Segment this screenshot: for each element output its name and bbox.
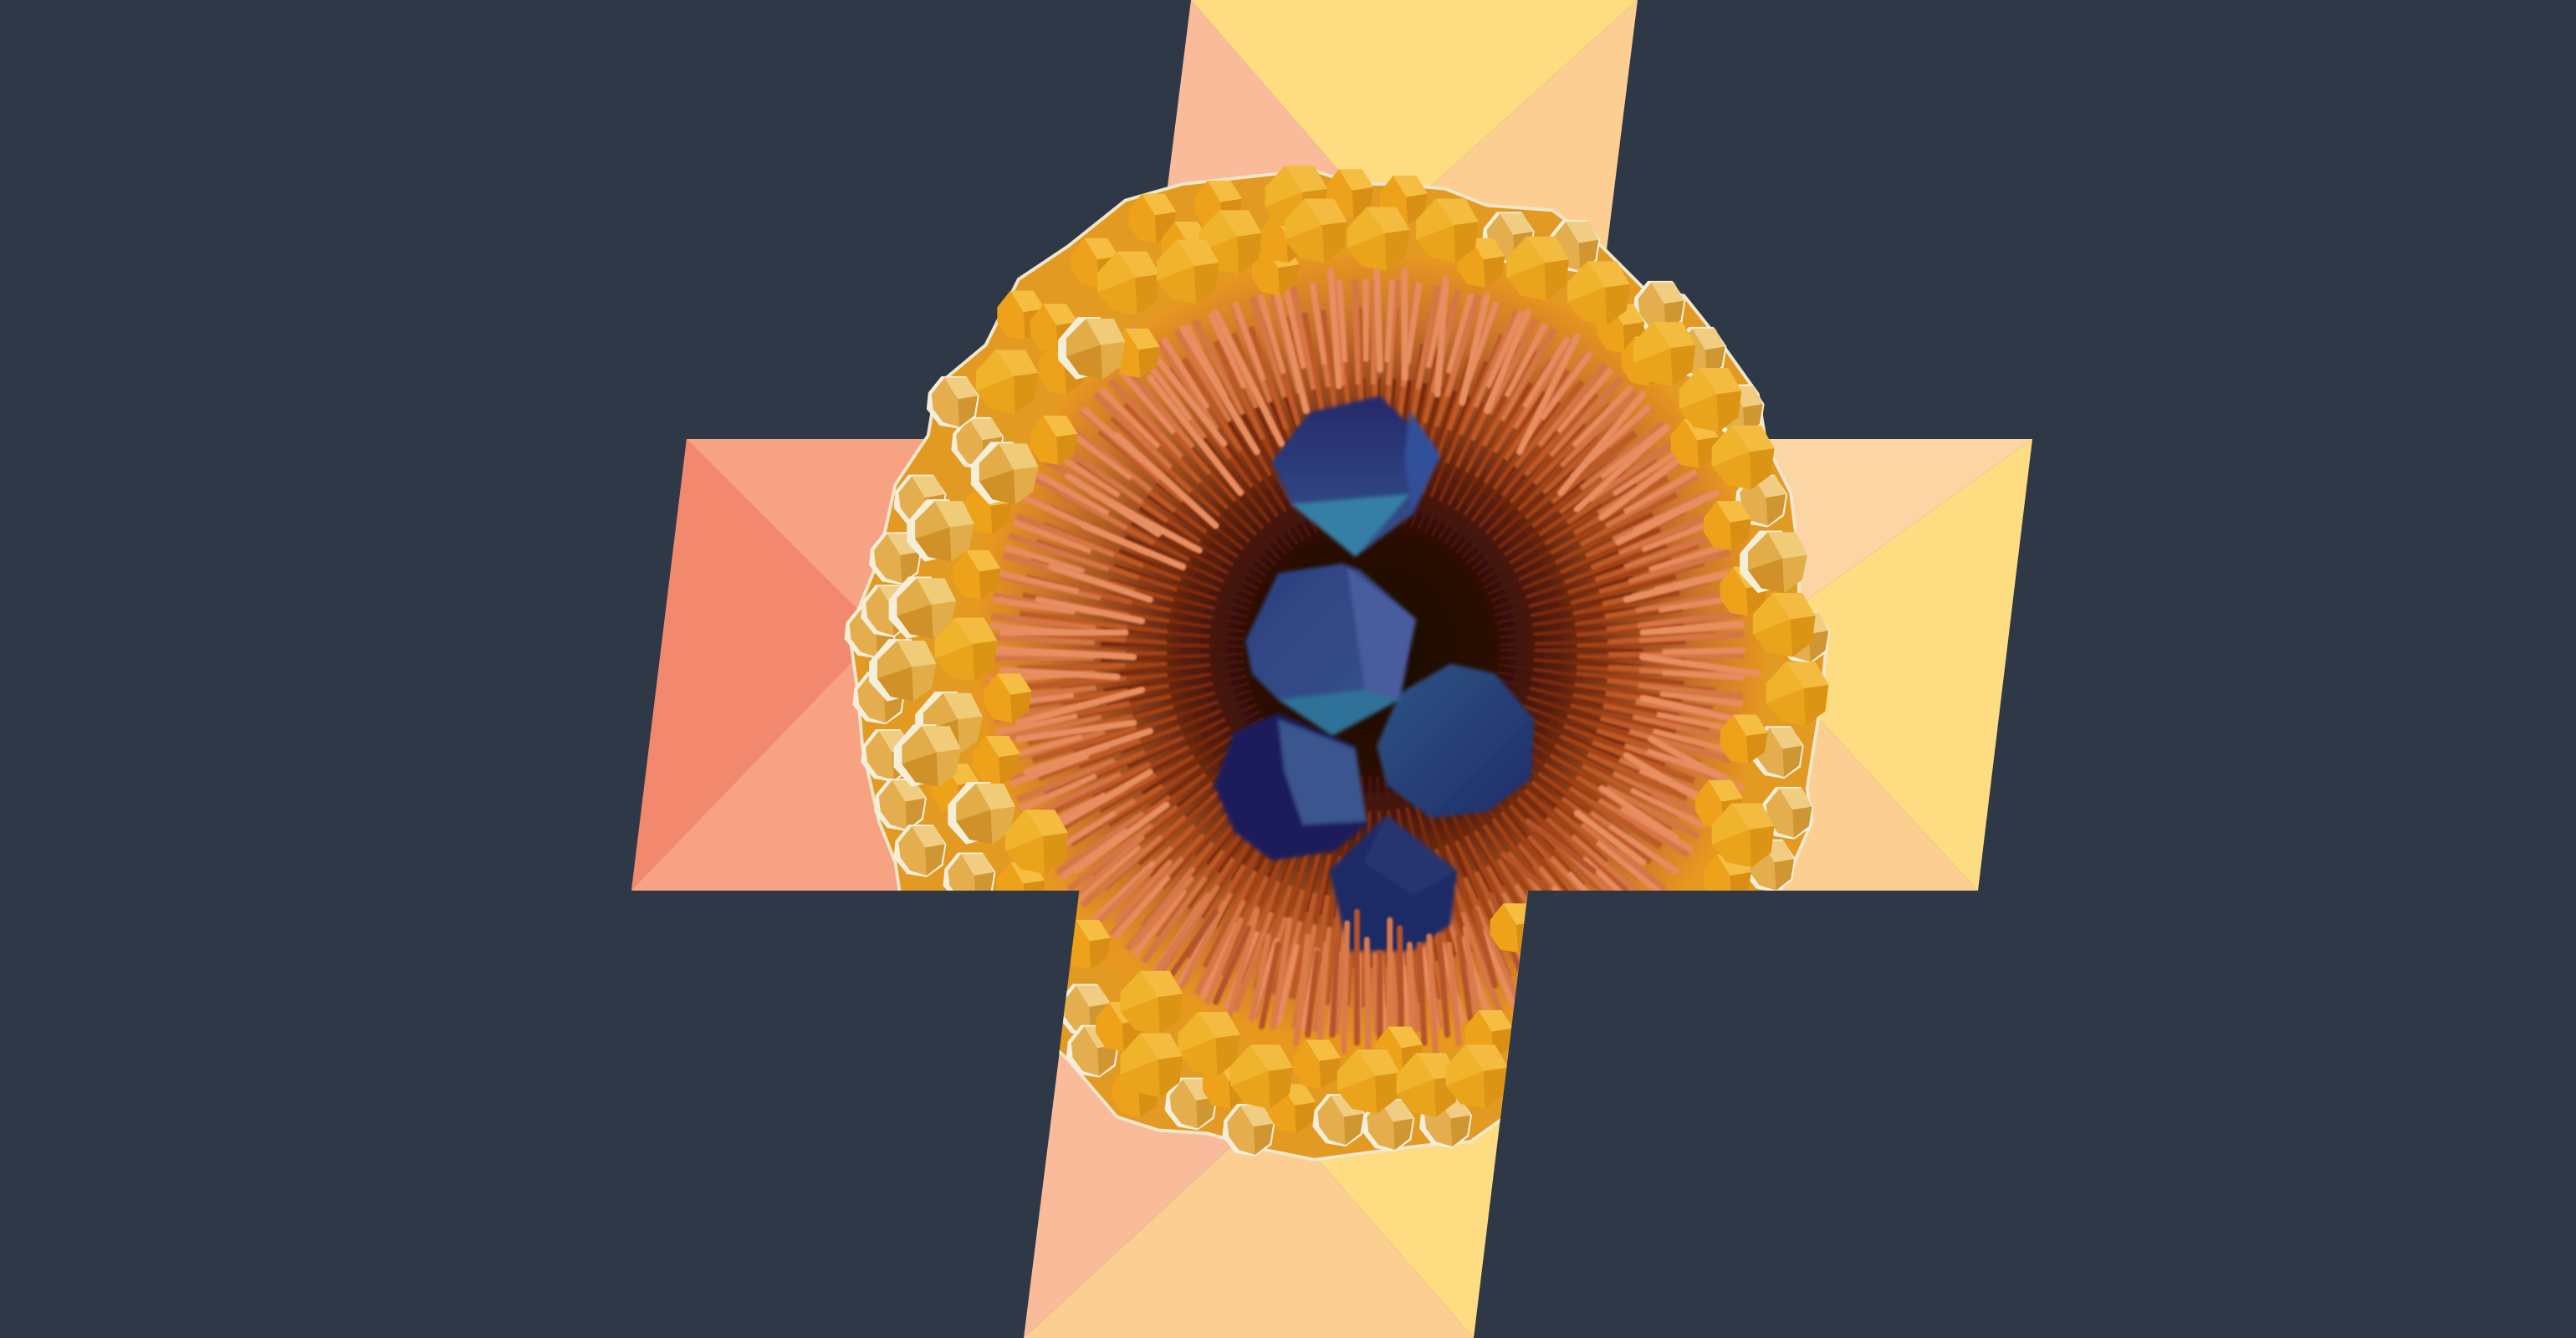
outer membrane silhouette [850,171,1827,1160]
drug particle 1, top [1271,396,1441,557]
illustration: liposome on cross [631,0,2032,1338]
panel: right yellow square [1528,439,2032,891]
drug particle 5, bottom [1329,815,1457,951]
front lipid tails, bottom [1076,821,1593,1060]
panel: top square [1136,0,1638,439]
lipid tails [987,264,1757,1036]
front lipid tails, left and right [994,271,1758,871]
drug particle 2, centre [1245,564,1416,736]
lipid heads, back layer [845,169,1830,1157]
drug particle 3, right [1377,664,1535,818]
panel: bottom square [1024,891,1528,1338]
drug particle 4, lower left [1214,713,1367,861]
panel: centre square [1080,439,1583,891]
panel: left coral square [631,439,1136,891]
lipid heads, front layer [869,166,1828,1117]
liposome [845,166,1830,1160]
